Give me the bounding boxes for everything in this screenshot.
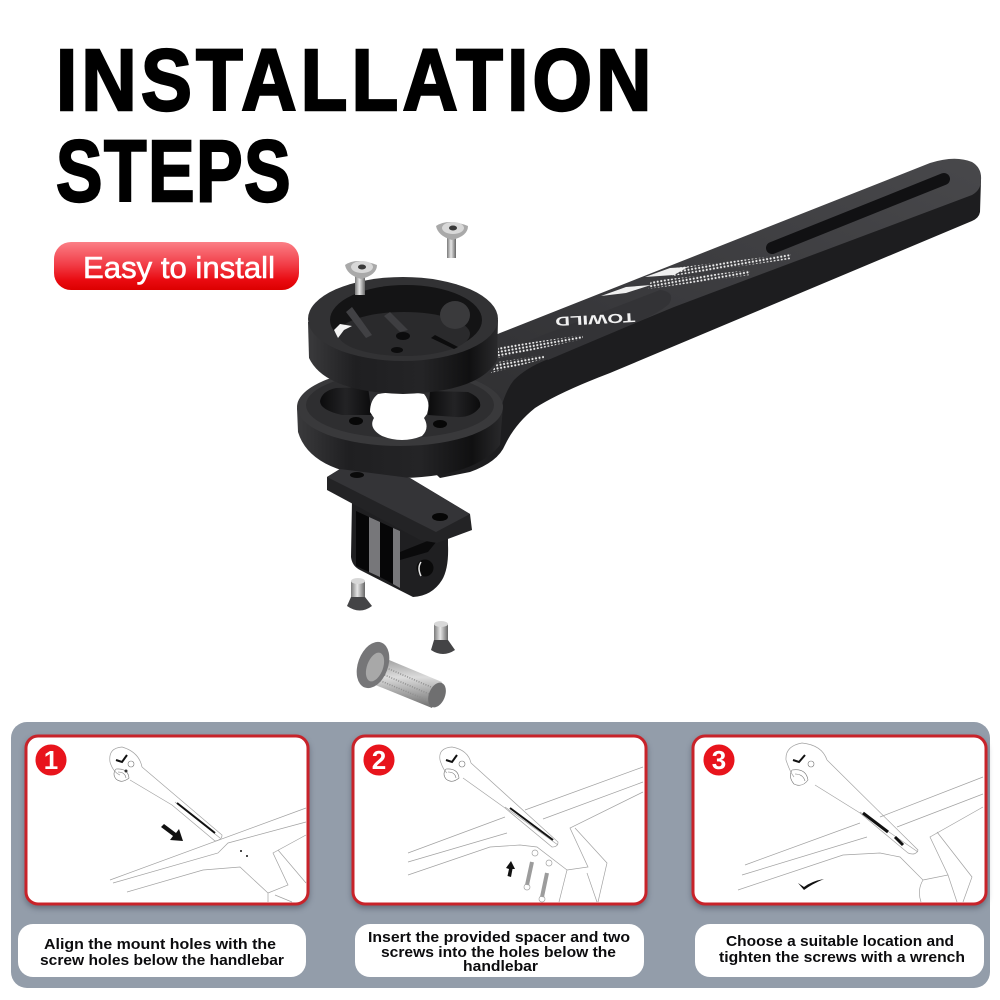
step 2 card xyxy=(353,736,646,904)
step 1 caption: Align the mount holes with the xyxy=(44,936,276,953)
panel: steps xyxy=(11,722,990,988)
step 1 xyxy=(18,736,308,977)
ring cut-outs xyxy=(320,387,372,415)
screw top right xyxy=(436,222,468,258)
inner mount plate xyxy=(338,312,470,356)
step 1 caption box xyxy=(18,924,306,977)
bolt xyxy=(351,637,449,710)
step 2 arrow xyxy=(506,861,515,877)
step 1 arrow xyxy=(161,824,183,841)
screw lower left xyxy=(347,578,372,610)
step 2 caption: handlebar xyxy=(463,958,538,975)
title: INSTALLATION xyxy=(56,32,656,129)
step 2 xyxy=(353,736,646,977)
step 2 number xyxy=(363,744,395,776)
step 3 line drawing xyxy=(738,743,983,902)
step 1 caption: screw holes below the handlebar xyxy=(40,952,284,969)
lower ring xyxy=(297,368,503,478)
title xyxy=(56,32,656,220)
upper ring xyxy=(308,277,498,394)
camera adapter xyxy=(327,469,472,597)
step 2 line drawing xyxy=(408,747,643,902)
step 3 number xyxy=(703,744,735,776)
badge: easy to install: Easy to install xyxy=(83,250,275,285)
screw lower right xyxy=(431,621,455,654)
step 3 card xyxy=(693,736,986,904)
step 3 caption xyxy=(719,933,965,966)
mount arm xyxy=(400,159,981,478)
arm slot xyxy=(772,179,944,248)
step 1 number xyxy=(35,744,67,776)
brand text: TOWILD xyxy=(555,310,636,329)
step 2 caption box xyxy=(355,924,644,977)
step 2 caption: Insert the provided spacer and two xyxy=(368,929,630,946)
step 3 caption: Choose a suitable location and xyxy=(726,933,954,950)
step 1 line drawing xyxy=(110,747,306,902)
step 2 caption: screws into the holes below the xyxy=(381,944,616,961)
step 3 caption box xyxy=(695,924,984,977)
step 1 caption xyxy=(40,936,284,969)
reflective stripes xyxy=(491,254,791,373)
badge: easy to install xyxy=(54,242,299,290)
step 3 check mark xyxy=(798,879,824,890)
step 1 number: 1 xyxy=(44,745,58,775)
step 3 xyxy=(693,736,986,977)
step 3 number: 3 xyxy=(712,745,726,775)
step 2 number: 2 xyxy=(372,745,386,775)
title: STEPS xyxy=(56,123,292,220)
step 1 card xyxy=(26,736,308,904)
logo pad xyxy=(520,290,671,360)
step 2 caption xyxy=(368,929,630,975)
step 3 caption: tighten the screws with a wrench xyxy=(719,949,965,966)
product: exploded mount xyxy=(297,159,981,710)
screw top left xyxy=(345,261,377,295)
